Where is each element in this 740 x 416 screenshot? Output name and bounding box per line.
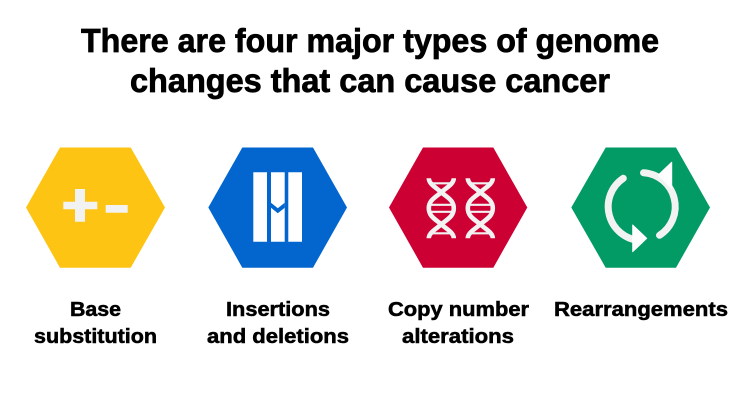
icon: plus and minus: [63, 189, 128, 222]
label: insertions and deletions: Insertions: [226, 298, 330, 321]
label: insertions and deletions: and deletions: [207, 325, 349, 348]
panel: copy number alterations: [388, 148, 529, 348]
icon: circular arrows: [608, 162, 675, 252]
label: base substitution: [34, 298, 157, 348]
panel: base substitution: [26, 148, 165, 348]
panel: rearrangements: [554, 148, 728, 321]
label: base substitution: Base: [70, 298, 121, 321]
title: There are four major types of genome: [81, 22, 659, 59]
title: changes that can cause cancer: [130, 62, 610, 99]
label: insertions and deletions: [207, 298, 349, 348]
green hexagon: [571, 148, 710, 268]
label: copy number alterations: Copy number: [388, 298, 529, 321]
blue hexagon: [208, 148, 347, 268]
label: rearrangements: Rearrangements: [554, 298, 728, 321]
red hexagon: [389, 148, 527, 268]
icon: two DNA helices: [429, 178, 493, 238]
label: base substitution: substitution: [34, 325, 157, 348]
title: [81, 22, 659, 99]
label: copy number alterations: alterations: [402, 325, 514, 348]
icon: three bars with notch: [253, 172, 302, 242]
panel: insertions and deletions: [207, 148, 349, 348]
label: copy number alterations: [388, 298, 529, 348]
yellow hexagon: [26, 148, 165, 268]
